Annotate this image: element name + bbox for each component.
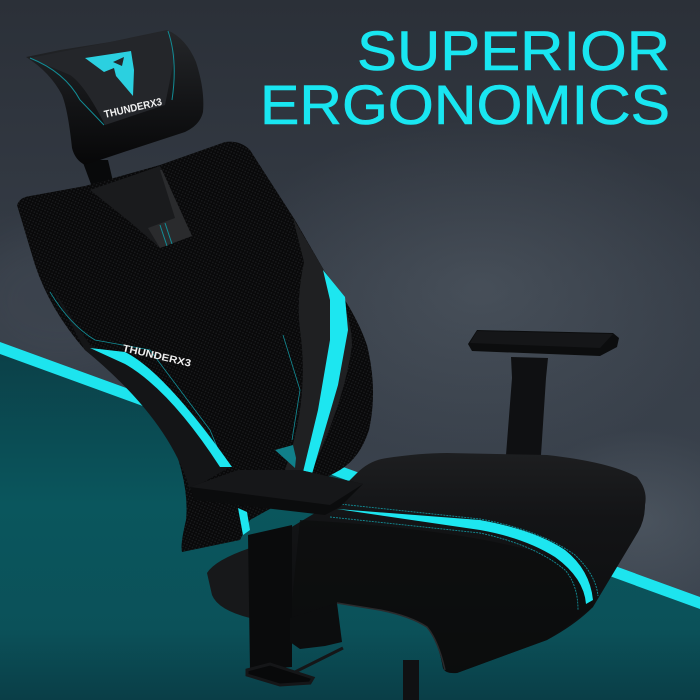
headrest brand text: THUNDERX3 xyxy=(103,96,163,121)
front armrest post xyxy=(247,525,343,685)
seat piping xyxy=(337,603,445,670)
cyan stripe right xyxy=(303,270,348,474)
seat xyxy=(270,453,646,673)
backrest lower panel xyxy=(50,285,230,490)
title line one: SUPERIOR xyxy=(357,19,670,82)
cyan seat stripe xyxy=(337,509,593,604)
armrest foot bracket xyxy=(247,648,343,685)
title line two: ERGONOMICS xyxy=(260,73,670,136)
central gas lift xyxy=(403,660,419,700)
title xyxy=(260,19,670,136)
cyan floor light stripe xyxy=(0,342,700,609)
backrest centre panel xyxy=(90,166,192,248)
cyan stripe left xyxy=(90,348,232,467)
seat stitching xyxy=(330,503,598,610)
headrest logo xyxy=(85,51,134,96)
teal accent under backrest xyxy=(275,445,296,468)
right armrest post xyxy=(506,357,548,455)
backrest brand text: THUNDERX3 xyxy=(121,343,192,370)
right armrest xyxy=(468,330,619,455)
front armrest pad xyxy=(190,470,363,515)
backrest xyxy=(17,142,373,552)
headrest support xyxy=(82,160,115,195)
headrest xyxy=(26,30,203,165)
lower seat cushion xyxy=(207,548,290,640)
backrest side panel xyxy=(285,218,352,474)
seat front shading xyxy=(290,520,593,673)
right armrest pad xyxy=(468,330,619,356)
teal floor xyxy=(0,345,700,700)
